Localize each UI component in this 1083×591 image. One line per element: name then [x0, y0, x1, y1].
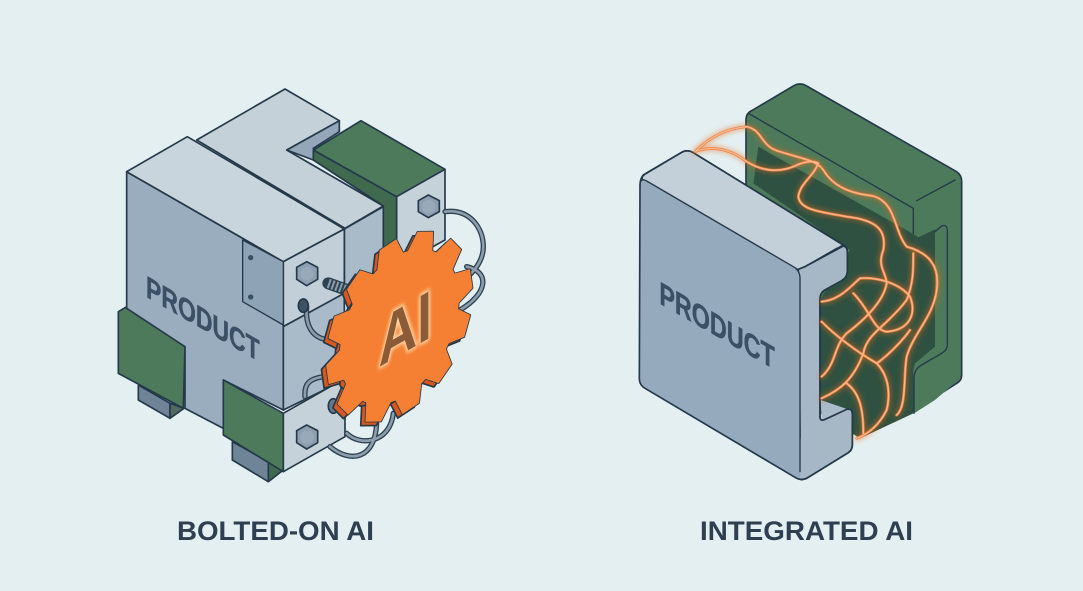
- back product slab: [197, 89, 383, 303]
- front top face: [127, 137, 344, 262]
- lower green feet: [138, 385, 283, 482]
- product outline: [639, 151, 852, 479]
- text: AI: AI: [379, 275, 432, 382]
- front product face: [127, 172, 283, 428]
- product front face: [639, 180, 800, 479]
- green left clamp: [118, 307, 185, 408]
- panel: integrated AI illustration: [639, 84, 962, 479]
- green top edge and side line: [748, 113, 955, 233]
- glowing orange AI wires: [695, 127, 937, 438]
- text: PRODUCT: PRODUCT: [146, 269, 260, 369]
- green inner slot: [914, 225, 958, 413]
- product top face: [642, 151, 843, 270]
- wires: [305, 211, 483, 456]
- dark cavity: [753, 147, 935, 438]
- green host block: [746, 84, 962, 416]
- metal lower block with bolt: [283, 378, 345, 472]
- panel: bolted-on AI illustration: [118, 89, 483, 482]
- lower notch: [821, 400, 850, 420]
- upper front bolt: [297, 262, 318, 286]
- bracket plate with rivets: [243, 240, 283, 325]
- green rear bracket: [313, 121, 445, 253]
- icon: orange AI gear: [321, 202, 473, 456]
- caption: integrated AI: INTEGRATED AI: [700, 516, 913, 546]
- front right face: [283, 229, 344, 410]
- text: PRODUCT: PRODUCT: [659, 274, 775, 377]
- product edge detail: [640, 180, 837, 472]
- slot outline: [914, 225, 947, 413]
- caption: bolted-on AI: BOLTED-ON AI: [177, 516, 374, 546]
- rear metal block with bolt: [397, 169, 445, 267]
- green lower clamp: [223, 380, 283, 472]
- text: AI: AI: [379, 275, 432, 382]
- product right side: [797, 246, 852, 479]
- screw and wire socket: [298, 283, 352, 413]
